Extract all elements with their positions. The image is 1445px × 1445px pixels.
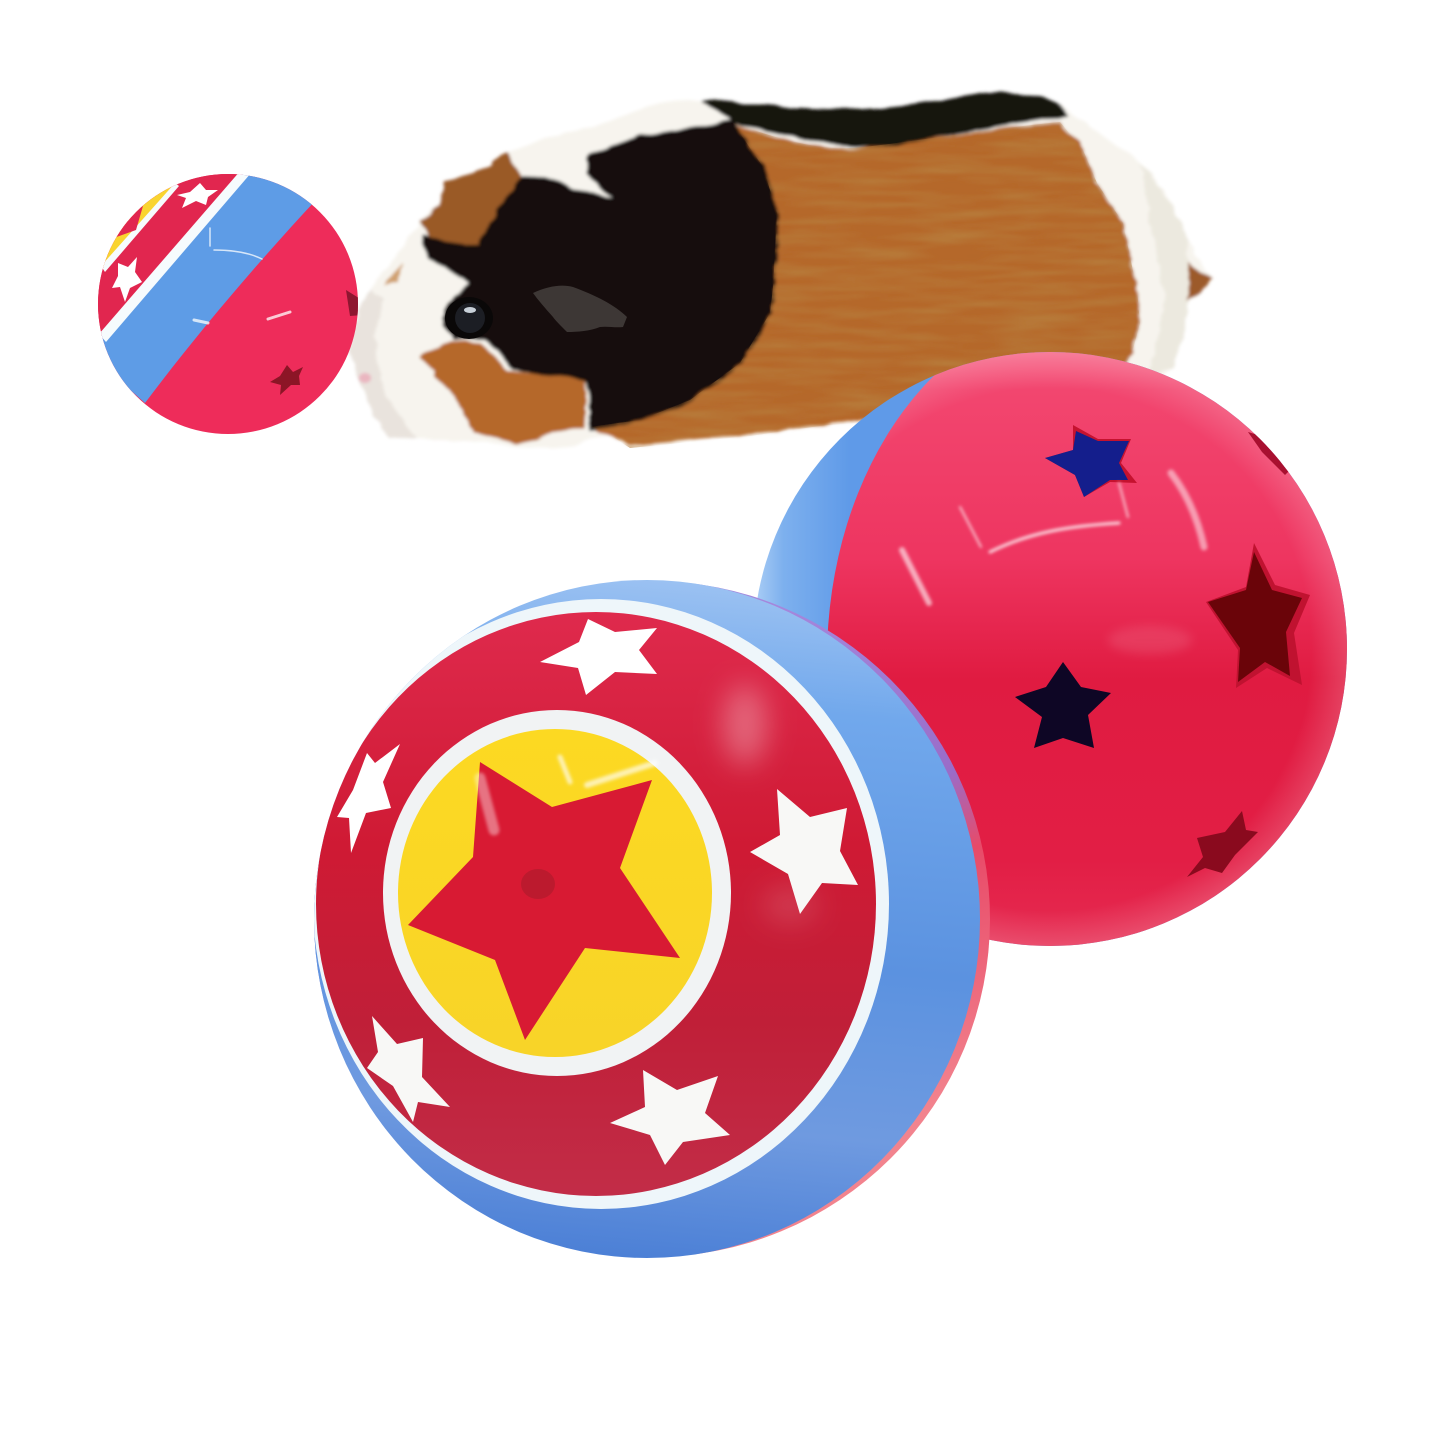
guinea pig brown muzzle fleck xyxy=(385,262,403,285)
front ball star dimple xyxy=(521,869,555,899)
guinea pig body fur texture xyxy=(590,120,1150,450)
rear ball lower star hole xyxy=(1187,811,1258,877)
rear ball large star hole xyxy=(1206,543,1310,688)
guinea pig nose xyxy=(359,373,371,383)
front ball central white ring xyxy=(383,710,731,1076)
guinea pig rump shading xyxy=(1140,163,1190,375)
rear ball blue shell xyxy=(753,352,1347,946)
rear ball top right hole xyxy=(1248,432,1290,475)
small ball highlights xyxy=(194,228,290,323)
front ball lower star xyxy=(610,1070,730,1165)
guinea pig ear xyxy=(533,286,627,332)
front ball right star xyxy=(750,789,858,914)
guinea pig brown body xyxy=(590,122,1140,448)
small ball yellow centre xyxy=(103,186,172,268)
guinea pig brown forehead patch xyxy=(420,153,520,245)
small ball red star fragment xyxy=(116,206,143,237)
small ball top star xyxy=(177,183,218,208)
front ball red disc xyxy=(316,612,876,1196)
rear ball soft reflection xyxy=(1108,626,1192,654)
front ball left star xyxy=(337,744,400,853)
front ball white ring xyxy=(313,599,889,1209)
guinea pig black saddle xyxy=(695,88,1068,147)
small ball xyxy=(98,174,358,434)
small ball white stripe xyxy=(99,170,251,342)
small ball edge hole xyxy=(346,290,358,316)
guinea pig brown cheek patch xyxy=(420,340,587,443)
front ball lower left star xyxy=(367,1016,450,1122)
small ball left star xyxy=(112,257,142,302)
small ball blue band xyxy=(101,174,312,403)
small ball star hole xyxy=(270,365,303,395)
front ball glossy highlights xyxy=(480,757,655,830)
front ball top star xyxy=(540,619,657,695)
small ball thin white ring xyxy=(101,183,179,272)
front ball blue shell xyxy=(314,580,980,1258)
guinea pig eye xyxy=(445,297,493,339)
rear ball xyxy=(758,352,1347,946)
rear ball middle star hole xyxy=(1015,662,1111,748)
front ball xyxy=(313,580,990,1258)
guinea pig rear foot xyxy=(1187,262,1214,302)
front ball red highlights xyxy=(723,685,818,923)
guinea pig black shoulder and head xyxy=(423,123,777,427)
guinea pig muzzle shading xyxy=(350,287,420,442)
rear ball pink shell xyxy=(828,352,1347,946)
guinea pig xyxy=(340,80,1230,460)
rear ball highlights xyxy=(902,473,1204,603)
front ball yellow disc xyxy=(398,729,712,1057)
front ball pink edge xyxy=(314,581,990,1257)
small ball red cap xyxy=(98,174,239,336)
front ball central red star xyxy=(408,762,680,1040)
rear ball top star hole xyxy=(1045,425,1137,497)
